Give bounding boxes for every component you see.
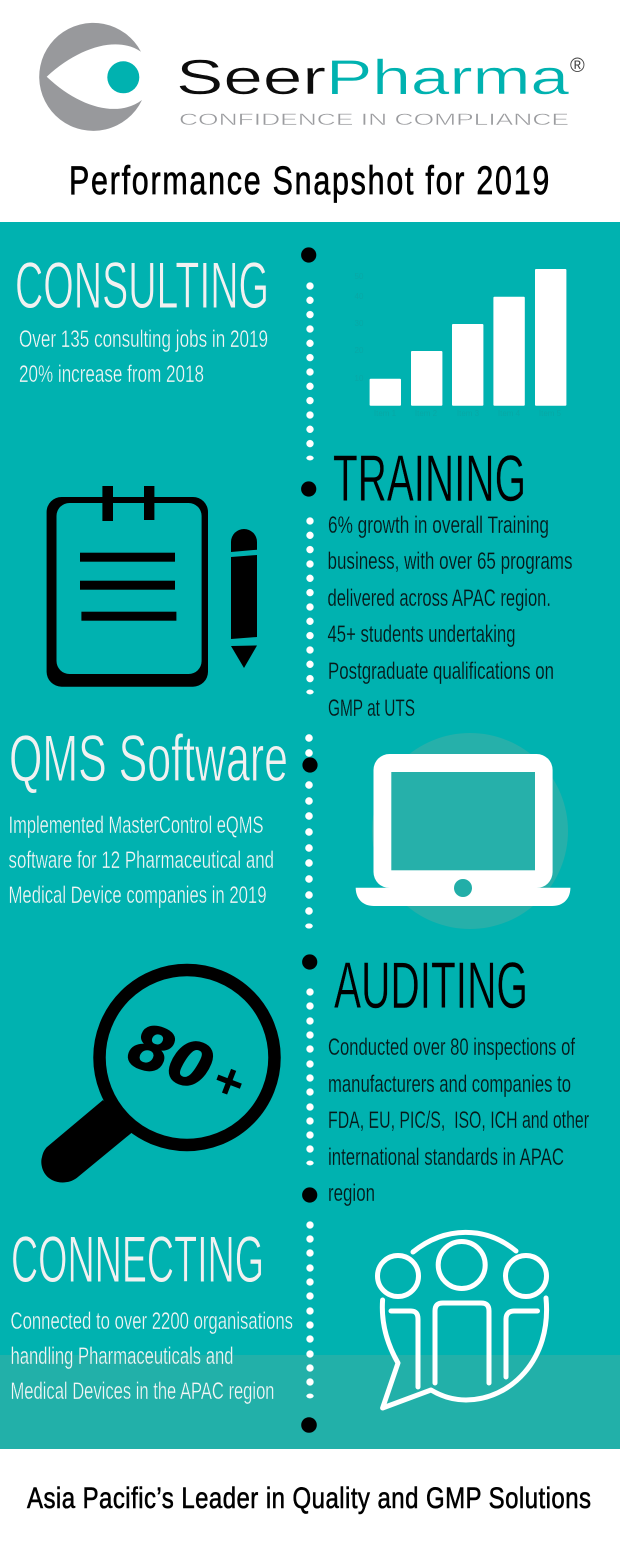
text: connecting details: handling Pharmaceuticals and — [10, 1343, 234, 1370]
bar chart: Item 5 — [539, 409, 562, 418]
bar chart: 20 — [355, 346, 364, 355]
bar chart: Item 2 — [415, 409, 438, 418]
text: qms details — [8, 812, 274, 909]
text: connecting details: Medical Devices in the APAC region — [10, 1378, 274, 1405]
bar chart: 30 — [355, 319, 364, 328]
bar chart — [355, 269, 566, 418]
title: Performance Snapshot for 2019 — [69, 158, 549, 203]
heading: connecting: CONNECTING — [11, 1222, 264, 1296]
panel: connecting — [10, 1222, 293, 1405]
text: consulting details: 20% increase from 2018 — [19, 361, 204, 388]
panel: consulting — [15, 248, 269, 388]
text: qms details: software for 12 Pharmaceutical and — [8, 847, 274, 874]
label: 80+: 80 — [119, 1008, 223, 1106]
wordmark: Pharma — [326, 51, 570, 105]
panel: qms software — [8, 721, 288, 909]
bar chart: Item 4 — [498, 409, 521, 418]
timeline: dotted connector — [305, 282, 314, 1398]
footer tagline: Asia Pacific’s Leader in Quality and GMP Solutions — [27, 1480, 591, 1515]
logo: SeerPharma — [39, 23, 585, 131]
text: training details: 45+ students undertaking — [328, 621, 516, 648]
text: qms details: Implemented MasterControl eQMS — [8, 812, 264, 839]
wordmark: Seer — [176, 51, 326, 105]
icon: eye — [39, 23, 142, 131]
text: training details: GMP at UTS — [328, 695, 415, 722]
timeline: black nodes — [301, 247, 318, 1433]
label: 80+: + — [206, 1050, 253, 1113]
tagline: CONFIDENCE IN COMPLIANCE — [179, 110, 569, 129]
icon: magnifying glass — [41, 970, 274, 1182]
icon: laptop — [356, 733, 570, 929]
wordmark — [176, 51, 585, 105]
text: connecting details — [10, 1308, 293, 1405]
text: auditing details — [328, 1034, 589, 1207]
icon: people in speech bubble — [378, 1232, 547, 1408]
bar chart: 10 — [355, 374, 364, 383]
bar chart: Item 3 — [457, 409, 480, 418]
bar chart: 40 — [355, 292, 364, 301]
panel: training — [328, 441, 572, 722]
text: consulting details — [19, 326, 268, 388]
bar chart: 50 — [355, 272, 364, 281]
panel: auditing — [328, 948, 589, 1207]
wordmark: ® — [570, 55, 585, 77]
text: auditing details: region — [328, 1180, 375, 1207]
text: training details — [328, 512, 572, 722]
panel: teal background — [0, 222, 620, 1449]
text: qms details: Medical Device companies in 2019 — [8, 882, 266, 909]
heading: qms software: QMS Software — [9, 721, 288, 795]
heading: consulting: CONSULTING — [15, 248, 269, 322]
icon: notepad and pencil — [47, 486, 257, 687]
text: connecting details: Connected to over 2200 organisations — [10, 1308, 293, 1335]
text: consulting details: Over 135 consulting jobs in 2019 — [19, 326, 268, 353]
bar chart: Item 1 — [374, 409, 397, 418]
